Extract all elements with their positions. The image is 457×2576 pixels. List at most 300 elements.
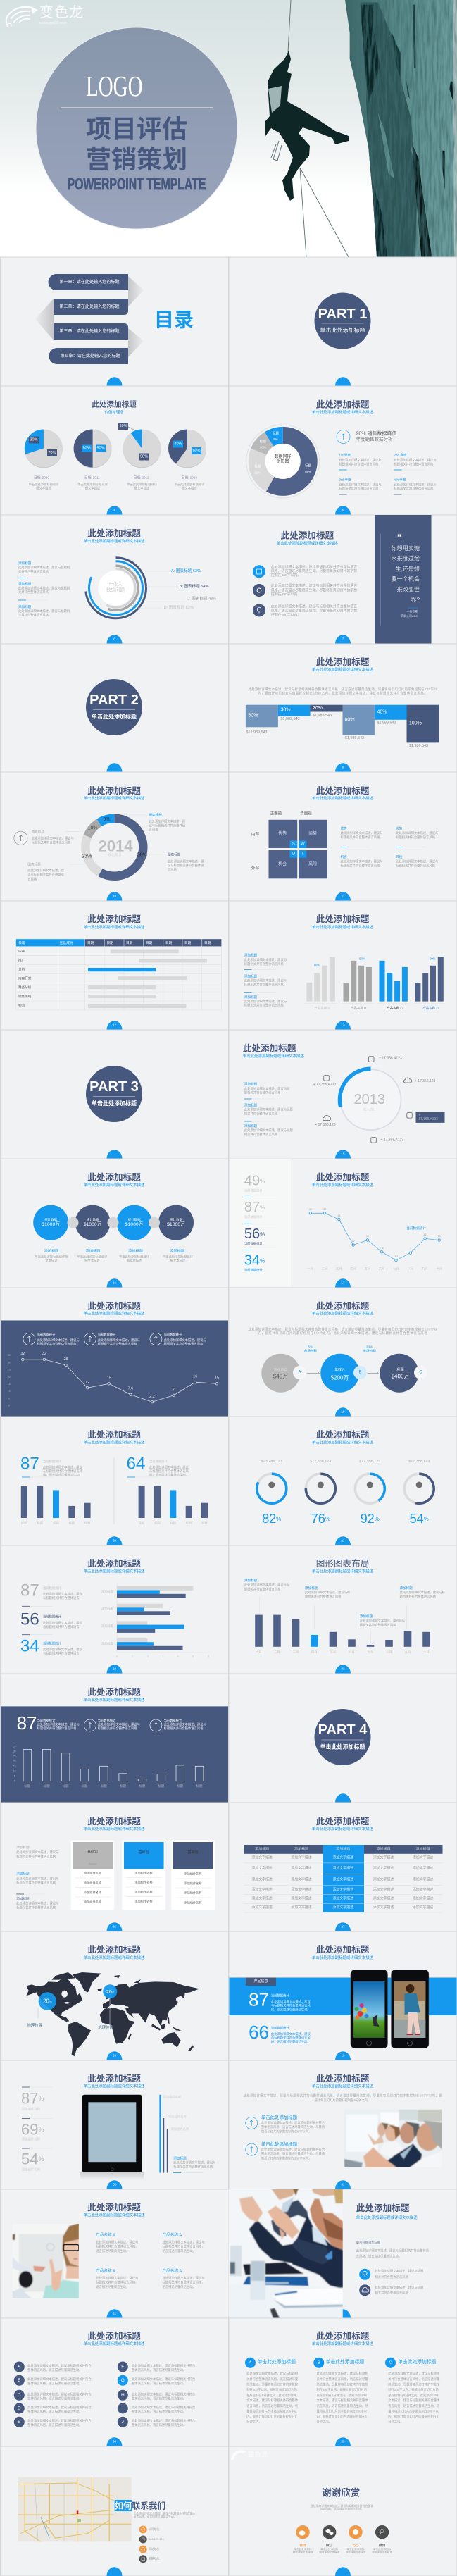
subheading: 单击此处添加副标题或详细文本描述 [312,409,374,415]
table: 添加文字描述 [251,1855,273,1860]
city map [18,2477,132,2541]
product tag [246,1978,276,1986]
note 2: 单击此处添加标题 [261,2141,298,2147]
chapter pill 1 [48,274,128,290]
social item: wechat [319,2525,339,2553]
value blocks: 100% [409,721,422,726]
page tab: 16 [113,1281,116,1285]
page tab [335,1021,351,1030]
panel 87 [20,1454,91,1526]
page tab: 17 [342,1281,345,1285]
page tab [335,1922,351,1931]
gantt chart [16,939,222,1010]
page tab [107,2567,123,2576]
subheading: 单击此处添加副标题或详细文本描述 [83,538,145,544]
top right note: 此处添加详细文本描述，建 [149,819,186,824]
monthly bars: 六月 [349,1649,355,1654]
top right note: 议与标题相关并符合整体语 [149,823,186,828]
heading: 此处添加标题 [87,2331,141,2341]
heading: 此处添加标题 [316,1429,370,1440]
page tab [107,1665,123,1674]
table: 添加文字描述 [291,1896,312,1900]
page tab: 28 [113,2054,116,2057]
note 2: 标题相关并符合整体语言风格 [98,1341,137,1347]
column C: 关并符合整体语言风格，语言描述尽量 [388,2377,440,2382]
page tab: 9 [342,765,344,769]
english subtitle: POWERPOINT TEMPLATE [68,175,206,193]
orbit metrics: + 17,356,123 [415,1079,436,1083]
text row 2: 风格，语言描述尽量简洁生动。尽量将每页幻灯片的字数 [271,587,357,593]
line chart: 16 [424,1233,426,1236]
donut chart: 标题 [305,463,311,468]
social item: qq [346,2525,366,2553]
left notes: 此处添加详细文本描述，建议与标题相 [18,609,70,614]
ring 92: 92% [361,1512,380,1526]
axis labels: 内部 [251,831,259,837]
page tab: 34 [113,2440,116,2443]
left notes: 此处添加详细文本描述，建议与 [16,1900,58,1906]
page tab [107,2051,123,2060]
right list: 此处添加详细文本描述，建议与标题相关并符合 [132,2392,196,2396]
gantt chart: 日期 [146,941,153,945]
SWOT notes: 优势 [341,826,347,830]
tablet [80,2095,144,2180]
stat 56: 当前数据统计 [244,1241,263,1246]
monthly bars [255,1615,430,1654]
note 2: 此处添加详细文本描述，建议与标题相关并符合 [261,2147,325,2152]
gantt chart: 分销 [18,966,25,972]
phone 1 [351,1970,387,2048]
left note: 标题相关并符合整体语言风格 [32,840,71,845]
page tab [335,1150,351,1159]
slide 21: four progress rings [229,1417,457,1545]
table: 添加文字描述 [333,1905,353,1910]
heading: 此处添加标题 [87,1558,141,1569]
table: 添加标题 [336,1847,350,1851]
donut 2014: 2014 [99,837,133,855]
heading: 此处添加标题 [87,2073,141,2084]
product notes: 标题相关并符合整体语言风格， [162,2279,205,2285]
page tab: 15 [342,1152,345,1155]
panel 87: 此处添加详细文本描述，建议 [43,1465,83,1469]
left notes: 相关并符合整体语言风格 [244,1132,278,1137]
pricing card 3: 添加组件名称 [184,1871,202,1877]
vertical bars: 此处添加详细文本描述，建议与 [173,2160,215,2165]
line chart: 16 [193,1375,197,1379]
heading: 此处添加标题 [316,1300,370,1312]
column B: B [318,2360,320,2365]
note 2: 当前数据统计 [98,1332,116,1337]
social item: wechat: 单击此处添加标 [320,2547,339,2551]
chapter pill 4: 第四章：请在此处输入您的标题 [60,353,120,359]
intro paragraph: 此处添加详细文本描述，建议与标题相关并符合整体语言风格，语言描述尽量简洁生动。尽量将每页幻灯片的字数控制在200字以 [248,1326,437,1331]
heading: 此处添加标题 [87,2202,141,2213]
value blocks: 60% [248,713,258,718]
left list: 此处添加详细文本描述，建议与标题相关并符合 [27,2363,92,2368]
page tab [335,2051,351,2060]
note 2 [84,1718,140,1731]
gantt chart: 日期 [165,941,173,945]
subheading: 单击此处添加副标题或详细文本描述 [312,1826,374,1831]
product notes: 语言描述尽量简洁生动。 [162,2284,196,2289]
quote panel: 来改变世 [397,586,420,593]
table: 添加文字描述 [251,1877,273,1882]
page tab [107,1922,123,1931]
stat 87: 与标题相关并符合整体语言风 [271,2003,311,2008]
column A: 量将每页幻灯片的字数控制在200字以 [246,2409,298,2413]
product notes: 产品名称 A [96,2268,115,2274]
panel 64: 格，语言描述尽量简洁生动。 [149,1472,189,1478]
subheading: 单击此处添加副标题或详细文本描述 [83,1569,145,1574]
product bars B: 50% [359,957,365,961]
contents heading: 目录 [154,309,194,331]
slide 26: pricing cards [0,1803,228,1931]
ribbon folds [35,276,144,357]
note 2: 当前数据统计 [98,1718,116,1723]
gantt chart: 物流 [18,1003,25,1008]
left list: 此处添加详细文本描述，建议与标题相关并符合 [27,2405,92,2410]
page tab: 26 [113,1924,116,1929]
circle chain: $1000万 [167,1221,185,1227]
left notes: 标题相关并符合整体语言风格 [244,982,284,988]
circle captions: 细文本描述 [170,1258,186,1263]
left notes: 标题相关并符合整体语言风格 [16,1905,56,1910]
page tab [107,763,123,772]
stat 34: 34 [20,1636,39,1655]
feature 2: 此处添加详细文本描述，建议与标题 [375,2285,424,2290]
SWOT notes [341,826,438,868]
circle captions: 单击此处添加标题或详 [163,1254,194,1259]
intro text: 言风格，语言描述尽量简洁生动。 [356,2253,401,2258]
subheading: 单击此处添加副标题或详细文本描述 [243,1053,304,1059]
note 3: 当前数据统计 [164,1718,182,1723]
horizontal bar chart: 添加标题 [101,1641,114,1646]
product notes [96,2232,205,2289]
amounts [261,1460,430,1464]
thanks description: 此处添加详细文本描述，建议与标题相关并符合整体 [311,2504,373,2508]
SWOT matrix: 风险 [308,861,317,866]
gantt chart: 推广 [18,958,25,962]
page tab: 5 [342,509,344,511]
heading: 此处添加标题 [316,2073,370,2084]
text row 2 [253,583,357,597]
note 2: 此处添加详细文本描述，建议与 [98,1722,140,1727]
product notes: 此处添加详细文本描述，建议与 [96,2240,138,2245]
side panel [230,1159,292,1288]
pricing card 2: 添加组件名称 [134,1871,153,1875]
contact items: 123-123-123 [149,2538,164,2541]
part badge: PART 2 [89,692,139,708]
column C: 最好控制在5分钟之内。此处添加详细 [388,2393,438,2398]
panel 87: 标题 [84,1520,91,1526]
ring 76 [306,1474,335,1526]
social item: tencent weibo [372,2525,392,2553]
page tab [335,1536,351,1545]
pricing card 1 [71,1840,114,1910]
stat 87: 当前数据统计 [244,1214,263,1219]
slide 25: part 4 divider [229,1674,457,1803]
orbit metrics [313,1056,445,1143]
subheading: 单击此处添加副标题或详细文本描述 [312,924,374,930]
stat 87: 此处添加详细文本描述，建议与 [37,1722,80,1727]
panel 64: 当前数据统计 [149,1459,168,1464]
product notes: 语言描述尽量简洁生动。 [162,2248,196,2253]
table: 添加文字描述 [373,1855,394,1860]
circle chain: 统计数据 [87,1217,99,1222]
quarter notes [339,452,437,494]
subheading: 单击此处添加副标题或详细文本描述 [312,2084,374,2089]
ring 82 [257,1474,287,1526]
peak value: 98% 销售数据峰值 [356,430,396,437]
panel 87: 标题 [21,1520,27,1526]
slide 11: SWOT [229,772,457,901]
axis labels: 正面题 [270,811,282,816]
social item: weibo: 单击此处添加标 [294,2547,312,2551]
peak value [356,430,396,442]
left notes: 此处添加详细文本描述，建议与 [244,999,287,1004]
donut 2014: 9% [103,817,111,822]
left notes: 关并符合整体语言风格 [18,613,49,617]
pie captions: 日期: 2012 [134,476,149,480]
line chart: 三月 [336,1267,342,1271]
table: 添加文字描述 [251,1865,273,1870]
intro paragraph: 此处添加详细文本描述，建议与标题相关并符合整体语言风格，语言描述尽量简洁生动。尽量将每页幻灯片的字数控制在200字以内，据 [244,2093,442,2098]
rock cliff [345,0,457,257]
table: 添加文字描述 [333,1887,353,1892]
column C: 文本描述，建议与标题相关并符合整体 [388,2398,440,2403]
donut chart: 标题 [254,464,261,469]
SWOT matrix: 劣势 [308,830,317,836]
pie captions: 单击此处添加标题或详 [77,482,108,487]
table: 添加文字描述 [373,1865,394,1870]
slide 4: four pie charts [0,386,228,515]
flow circles: A [298,1371,301,1375]
value blocks: 40% [377,710,387,714]
page tab [107,2309,123,2318]
circle captions [35,1248,194,1263]
page tab: 20 [113,1538,116,1543]
pricing card 3: 基础包 [187,1850,199,1855]
left notes: 添加标题 [18,561,32,566]
quarter notes: 标题相关并符合整体语言风格 [339,462,379,466]
donut chart: 标题 [273,431,279,436]
ring chart: 年收入 [108,580,123,587]
product bars D: 50% [430,957,436,961]
line chart: 二月 [322,1267,327,1271]
horizontal bar chart: 添加标题 [101,1624,114,1629]
contact heading: 联系我们 [132,2501,165,2511]
slide 17: stats with line chart [229,1159,457,1288]
line chart: 10 [8,1390,11,1393]
SWOT notes: 此处添加详细文本描述，建议与 [396,859,438,864]
page tab [335,1665,351,1674]
slide 14: part 3 divider [0,1030,228,1159]
callouts [244,1578,446,1643]
slide 23: chart layout bars [229,1545,457,1674]
gantt chart: 内容开发 [18,976,32,981]
heading: 此处添加标题 [87,1944,141,1955]
orbit metrics: + 17,356,A123 [313,1083,337,1087]
left notes: 相关并符合整体语言风格 [244,1112,278,1116]
left notes: 标题相关并符合整体语言风格 [244,1003,284,1007]
panel 64: 与标题相关并符合整体语言风 [149,1469,189,1474]
stat 69: 添加组件名称 [22,2137,40,2141]
social item: qq: 题或详细文本描述 [346,2550,366,2553]
stat 87: 87 [249,1989,269,2010]
product notes: 标题相关并符合整体语言风格， [96,2279,138,2285]
column A: 内，据统计每页幻灯片的最好控制在5 [246,2414,297,2419]
stat 34: 当前数据统计 [244,1268,263,1272]
slide 8: part 2 divider [0,644,228,772]
stat 34: 34% [244,1253,265,1269]
contact heading: 如何 [115,2501,132,2511]
stat 87 [244,1200,276,1224]
line chart: 15 [8,1383,11,1386]
product bars D [414,957,445,1010]
heading: 此处添加标题 [316,914,370,924]
quote panel: 界? [411,597,420,603]
line chart: 七月 [393,1266,399,1271]
feature 1: 相关并符合整体语言风格 [375,2275,408,2279]
stat 56: 此处添加详细文本描述，建议 [43,1620,83,1625]
vertical bars [159,2095,215,2173]
vertical bars: 添加标题 [173,2155,187,2161]
column C: 单击此处添加标题 [398,2358,437,2365]
subheading: 单击此处添加副标题或详细文本描述 [312,1955,374,1960]
text row 1: 控制在200字以内。 [271,573,301,578]
pie captions: 日期: 2013 [182,476,197,480]
note 2: 此处添加详细文本描述，建议与 [98,1338,140,1343]
outline bar chart: 20 [13,1760,16,1763]
watermark logo: www.ppt20.com [39,21,67,25]
quarter notes: 标题相关并符合整体语言风格 [339,486,379,492]
line chart: 2.2 [394,1255,398,1258]
circle chain: $1000万 [42,1221,60,1227]
lower right note: 言风格 [168,867,177,872]
page tab [107,377,123,386]
stat 87: 87 [20,1581,39,1600]
orbit metrics: + [418,1113,421,1116]
text row 3 [253,604,357,617]
orbit metrics: + 17,356,123 [315,1123,336,1127]
panel 64: 标题 [139,1520,145,1526]
table: 添加文字描述 [291,1877,312,1882]
slide 37: thank you [229,2446,457,2576]
left list: 整体语言风格，语言描述尽量简洁生动。 [27,2422,82,2427]
left notes: 添加标题 [16,1845,30,1850]
SWOT notes: 此处添加详细文本描述，建议与 [341,830,383,835]
pie captions: 日期: 2011 [84,476,100,480]
panel 64: 64 [127,1454,145,1474]
slide 2: table of contents [0,257,228,386]
column C: 此处添加详细文本描述，建议与标题相 [388,2371,439,2376]
axis labels: 外部 [251,865,259,871]
donut 2014: 10% [88,826,98,831]
note 1: 当前数据统计 [37,1332,56,1337]
monthly bars: 九月 [405,1649,411,1654]
horizontal bar chart: 添加标题 [101,1606,114,1612]
feature 2: 相关并符合整体语言风格 [375,2291,408,2295]
product bars A [304,957,337,1010]
page tab [335,2309,351,2318]
chapter pill 4 [49,348,128,364]
pricing card 1: 添加组件名称 [84,1890,101,1895]
contact items: 公司地址 [149,2527,159,2531]
column C: 制在200字以内，据统计每页幻灯片的 [388,2387,439,2392]
ring labels [138,568,216,610]
left notes: 此处添加详细文本描述，建议与标题相 [18,585,70,590]
column B: 最好控制在5分钟之内。此处添加详细 [317,2393,367,2398]
donut chart: 22% [254,471,261,475]
watermark logo [6,4,83,27]
contact description [134,2512,195,2518]
table: 添加文字描述 [373,1896,394,1900]
flow circles [261,1354,427,1393]
quarter notes: 3rd 季度 [339,478,351,482]
pie 2012 [118,423,161,468]
text row 3: 风格，语言描述尽量简洁生动。尽量将每页幻灯片的字数 [271,609,357,613]
right list: 整体语言风格，语言描述尽量简洁生动。 [132,2367,186,2372]
product tag: 产品信息 [253,1979,268,1984]
pie captions: 日期: 2010 [34,476,49,480]
divider [61,107,213,108]
left list: 此处添加详细文本描述，建议与标题相关并符合 [27,2377,92,2382]
left notes: 此处添加详细文本描述，建议与 [16,1850,58,1855]
left list: 整体语言风格，语言描述尽量简洁生动。 [27,2381,82,2386]
stat 87: 与标题相关并符合整体语言 [43,1595,80,1600]
panel 64: 标题 [154,1520,161,1526]
value blocks: 80% [345,717,355,723]
slide 10: 2014 donut [0,772,228,901]
line chart: 25 [8,1368,11,1371]
line chart [8,1352,219,1407]
slide 33: applause photo [224,2184,457,2323]
outline bar chart [13,1746,204,1788]
panel 87: 87 [20,1454,39,1474]
page tab: 29 [342,2054,345,2057]
left notes: 标题相关并符合整体语言风格 [244,962,284,966]
quote panel: 生,还是想 [395,565,420,572]
climber ropes [288,0,349,257]
flow circles: B [358,1371,362,1375]
subheading: 单击此处添加副标题或详细文本描述 [83,795,145,801]
pricing card 1: 添加组件名称 [84,1899,101,1905]
page tab: 11 [342,895,345,897]
text row 1 [253,565,357,578]
subheading: 单击此处添加副标题或详细文本描述 [83,1182,145,1188]
stat 87: 添加组件名称 [22,2106,40,2111]
subheading: 单击此处添加副标题或详细文本描述 [312,1569,374,1574]
value blocks: $1,989,543 [377,721,396,726]
note 3: 此处添加详细文本描述，建议与 [164,1722,206,1727]
subheading: 单击此处添加副标题或详细文本描述 [83,1697,145,1703]
peak value: 年度销售数据分析 [356,435,393,442]
table: 添加标题 [415,1847,430,1851]
heading: 此处添加标题 [87,785,141,796]
social item: qq: QQ [353,2544,358,2548]
table: 添加文字描述 [373,1887,394,1892]
quarter notes: 1st 季度 [339,452,351,458]
pricing card 1: 基础包 [87,1850,98,1855]
part badge: 单击此处添加标题 [92,713,137,720]
page tab [107,892,123,901]
pie captions: 单击此处添加标题或详 [175,482,205,487]
SWOT notes: 此处添加详细文本描述，建议与 [341,859,383,864]
pricing card 1: 添加组件名称 [84,1881,101,1885]
product bars B [342,957,373,1010]
pie 2011: 50% [96,447,105,451]
product notes: 此处添加详细文本描述，建议与 [162,2275,205,2281]
